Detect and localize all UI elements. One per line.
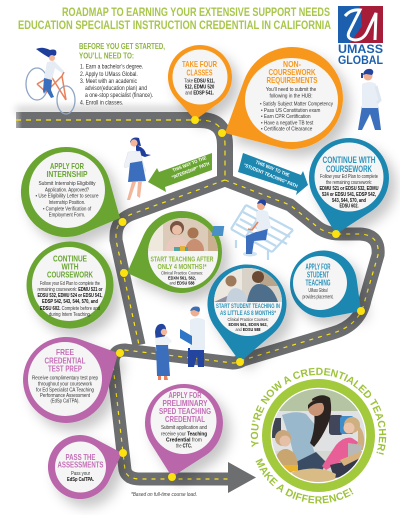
- pin: pass the assessments: PASS THE: [66, 453, 96, 462]
- pin: continue with coursework green: EDSU 532, EDMU 524 or EDSU 541,: [38, 293, 103, 299]
- UMass Global logo: [338, 6, 383, 67]
- pin: continue with coursework green: EDSU 602. Complete before and: [40, 306, 100, 312]
- pin: non-coursework requirements: You’ll need to submit the: [266, 87, 316, 93]
- pin: apply for internship: APPLY FOR: [50, 161, 84, 171]
- pin: start teaching after 4 months: and EDSU 588: [170, 280, 195, 286]
- credentialed teacher badge: [250, 368, 386, 504]
- green ring: [262, 379, 375, 492]
- pin: take four classes: 512, EDMU 520: [185, 84, 215, 90]
- pin: take four classes: CLASSES: [186, 68, 213, 78]
- pin: start teaching after 4 months: [127, 211, 222, 293]
- pin: continue with coursework blue: 524 or EDSU 541, EDSP 542,: [322, 192, 376, 198]
- pin: start teaching after 4 months: EDXN 561, 562,: [168, 276, 196, 281]
- pin: start student teaching in 8 months: Clinical Practice Courses:: [228, 317, 268, 322]
- pin: apply for preliminary sped teaching credential: receive your Teaching: [161, 432, 207, 438]
- arrow: road end: [228, 462, 256, 493]
- pin: take four classes: and EDSP 541.: [185, 90, 214, 96]
- title: [18, 7, 331, 32]
- pin: apply for preliminary sped teaching credential: CREDENTIAL: [165, 415, 205, 424]
- pin: free credential test prep: (EdSp CalTPA).: [50, 398, 80, 404]
- pin: continue with coursework green: COURSEWORK: [47, 270, 94, 280]
- pin: pass the assessments: EdSp CalTPA.: [67, 477, 94, 483]
- text block: before you get started: advisor(education plan) and: [85, 86, 147, 92]
- pin: continue with coursework green: Follow your Ed Plan to complete the: [40, 281, 100, 287]
- pin: free credential test prep: for Ed Specialist CA Teaching: [36, 388, 94, 394]
- pin: continue with coursework blue: CONTINUE WITH: [322, 155, 376, 165]
- pin: apply for internship: Employment Form.: [49, 212, 85, 219]
- pin: start teaching after 4 months: Clinical Practice Courses:: [161, 270, 203, 276]
- UMass Global logo: GLOBAL: [338, 55, 383, 67]
- pin: apply for student teaching: [290, 250, 361, 317]
- illustration: man on bench with laptop: [212, 200, 293, 260]
- pin: continue with coursework green: WITH: [62, 262, 78, 272]
- pin: apply for preliminary sped teaching credential: Submit application and: [161, 425, 207, 431]
- illustration: woman and man with tablet: [155, 306, 205, 380]
- pin: start teaching after 4 months: START TEACHING AFTER: [150, 257, 214, 264]
- text block: before you get started: a one-stop specialist (finance).: [85, 93, 154, 99]
- pin: free credential test prep: Performance Assessment: [40, 393, 90, 399]
- pin: start student teaching in 8 months: and EDSU 588: [236, 327, 261, 332]
- pin: non-coursework requirements: • Satisfy Subject Matter Competency: [260, 102, 333, 108]
- pin: continue with coursework green: [26, 242, 114, 328]
- pin: apply for preliminary sped teaching credential: [145, 384, 223, 477]
- pin: apply for internship: Submit Internship Eligibility: [38, 181, 96, 187]
- curved tagline: MAKE A DIFFERENCE!: [256, 458, 354, 504]
- pin: apply for preliminary sped teaching credential: the CTC.: [176, 444, 192, 450]
- pin: apply for student teaching: TEACHING: [306, 278, 330, 287]
- text block: before you get started: [79, 42, 165, 107]
- pin: continue with coursework blue: COURSEWORK: [326, 164, 372, 174]
- road network: [16, 107, 378, 479]
- pin: apply for student teaching: STUDENT: [307, 270, 329, 279]
- pin: pass the assessments: ASSESSMENTS: [58, 461, 104, 470]
- curved headline: YOU’RE NOW A CREDENTIALED TEACHER!: [250, 368, 386, 455]
- text block: before you get started: 1. Earn a bachelor’s degree.: [80, 64, 144, 71]
- pin: free credential test prep: throughout your coursework: [38, 382, 92, 388]
- text block: before you get started: 4. Enroll in classes.: [80, 100, 124, 107]
- arrow: internship path: “INTERNSHIP” PATH: [171, 161, 211, 181]
- arrow: internship path: THIS WAY TO THE: [172, 155, 208, 174]
- pin: pass the assessments: [48, 435, 122, 499]
- pin: non-coursework requirements: • Earn CPR Certification: [261, 114, 311, 120]
- pin: free credential test prep: CREDENTIAL: [44, 355, 86, 365]
- pin: continue with coursework blue: Follow your Ed Plan to complete: [320, 174, 378, 180]
- pin: apply for preliminary sped teaching credential: PRELIMINARY: [162, 399, 208, 408]
- pin: non-coursework requirements: [225, 47, 343, 149]
- pin: apply for student teaching: provides placement.: [302, 294, 334, 300]
- pin: apply for internship: Internship Position.: [49, 200, 85, 206]
- pin: continue with coursework green: during Intern Teaching.: [49, 312, 91, 318]
- text block: before you get started: 3. Meet with an academic: [80, 79, 137, 85]
- pin: non-coursework requirements: • Certificate of Clearance: [261, 126, 312, 133]
- pin: apply for preliminary sped teaching credential: SPED TEACHING: [159, 407, 211, 416]
- pin: apply for internship: INTERNSHIP: [46, 169, 88, 179]
- pin: continue with coursework green: remaining coursework: EDMU 521 or: [38, 287, 102, 293]
- text block: before you get started: 2. Apply to UMass Global.: [80, 72, 138, 78]
- title: EDUCATION SPECIALIST INSTRUCTION CREDENTIAL IN CALIFORNIA: [18, 20, 331, 32]
- pin: apply for internship: Application. Approved?: [45, 187, 89, 194]
- pin: apply for internship: • Use Eligibility Letter to secure: [36, 194, 98, 200]
- arrow: internship path: [148, 153, 212, 192]
- pin: continue with coursework blue: EDSU 602.: [340, 204, 359, 210]
- pin: free credential test prep: Receive complimentary test prep: [32, 376, 98, 382]
- pin: take four classes: TAKE FOUR: [182, 59, 217, 69]
- pin: start student teaching in 8 months: [207, 264, 286, 362]
- pin: free credential test prep: [23, 337, 118, 423]
- pin: start student teaching in 8 months: START STUDENT TEACHING IN: [216, 303, 280, 310]
- pin: take four classes: Take EDSU 511,: [184, 78, 215, 84]
- arrow: student teaching path: THIS WAY TO THE: [255, 160, 291, 179]
- pin: non-coursework requirements: NON-: [283, 59, 301, 69]
- pin: free credential test prep: FREE: [56, 347, 74, 357]
- photo: teacher with children: [270, 387, 368, 485]
- UMass Global logo: UMASS: [338, 44, 383, 56]
- pin: start student teaching in 8 months: EDXN 561, EDXN 562,: [228, 322, 268, 327]
- pin: continue with coursework blue: the remaining coursework:: [326, 180, 372, 186]
- illustration: man on phone: [358, 69, 381, 130]
- photo: mother and child: [148, 218, 218, 251]
- arrow: student teaching path: “STUDENT TEACHING” PATH: [242, 162, 299, 190]
- pin: non-coursework requirements: COURSEWORK: [268, 67, 316, 77]
- pin: take four classes: [168, 45, 232, 120]
- pin: non-coursework requirements: • Have a negative TB test: [261, 120, 314, 127]
- photo: two people at laptop: [214, 268, 282, 302]
- text block: before you get started: BEFORE YOU GET STARTED,: [79, 42, 165, 51]
- illustration: woman in blue skirt: [124, 138, 151, 200]
- pin: apply for preliminary sped teaching credential: APPLY FOR: [168, 391, 202, 400]
- road markers: yellow dots: [116, 116, 365, 481]
- pin: apply for preliminary sped teaching credential: Credential from: [166, 438, 203, 444]
- title: ROADMAP TO EARNING YOUR EXTENSIVE SUPPORT NEEDS: [62, 7, 330, 19]
- pin: apply for internship: [21, 147, 120, 237]
- pin: start teaching after 4 months: ONLY 4 MONTHS!*: [158, 264, 207, 271]
- pin: apply for student teaching: UMass Global: [308, 288, 328, 294]
- pin: start student teaching in 8 months: AS LITTLE AS 8 MONTHS*: [220, 310, 276, 317]
- illustration: woman on bicycle: [26, 48, 75, 114]
- text block: before you get started: YOU’LL NEED TO:: [79, 52, 134, 60]
- pin: apply for internship: • Complete Verification of: [43, 206, 92, 213]
- pin: pass the assessments: Pass your: [71, 471, 90, 477]
- pin: continue with coursework blue: EDMU 521 or EDSU 532, EDMU: [320, 186, 379, 192]
- pin: continue with coursework blue: [309, 138, 389, 234]
- pin: non-coursework requirements: • Pass US Constitution exam: [261, 108, 321, 114]
- pin: continue with coursework green: EDSP 542, 543, 544, 570, and: [42, 299, 98, 305]
- footnote: *Based on full-time course load.: [131, 492, 197, 498]
- pin: continue with coursework green: CONTINUE: [53, 254, 87, 264]
- arrow: student teaching path: [238, 153, 308, 195]
- pin: apply for student teaching: APPLY FOR: [306, 262, 331, 271]
- pin: free credential test prep: TEST PREP: [48, 364, 82, 374]
- pin: non-coursework requirements: following in the HUB:: [269, 93, 313, 100]
- pin: continue with coursework blue: 543, 544, 570, and: [332, 198, 366, 204]
- pin: non-coursework requirements: REQUIREMENTS: [266, 75, 318, 85]
